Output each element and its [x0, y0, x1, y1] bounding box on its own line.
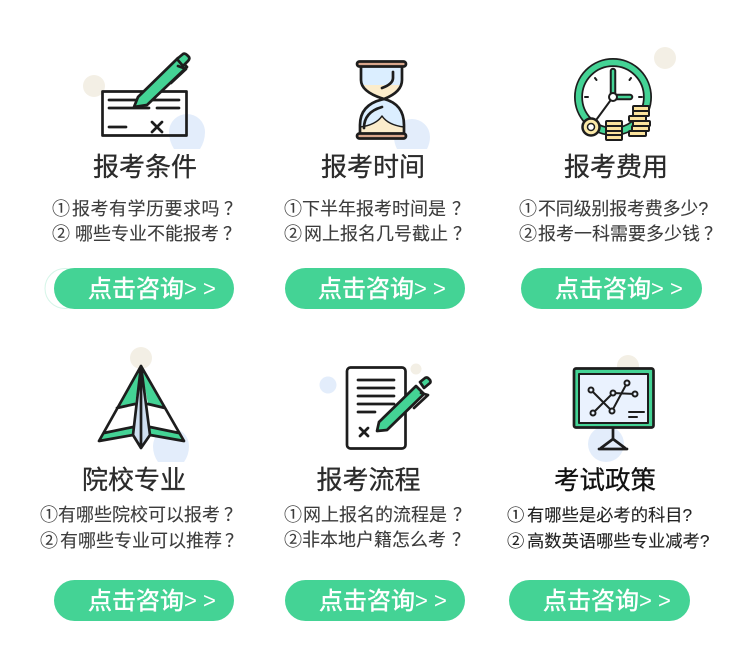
- question 1: 网上报名的流程是: [303, 505, 447, 525]
- button: 点击咨询: [88, 588, 184, 615]
- icon: clock and coins: [578, 47, 676, 140]
- button: > >: [639, 588, 671, 613]
- question 1: ①: [52, 199, 70, 219]
- question 1: ①: [40, 505, 58, 525]
- button: [521, 268, 702, 309]
- question 2: 高数英语哪些专业减考?: [527, 531, 709, 551]
- heading: 考试政策: [554, 467, 656, 495]
- question 2: ②: [40, 531, 58, 551]
- question 2: 有哪些专业可以推荐: [60, 531, 222, 551]
- button: [45, 268, 234, 309]
- button: > >: [651, 276, 683, 301]
- heading: 报考流程: [316, 465, 421, 495]
- question 1: 有哪些院校可以报考: [58, 505, 220, 525]
- button: 点击咨询: [319, 588, 415, 615]
- icon: paper plane: [99, 347, 189, 462]
- button: 点击咨询: [318, 276, 414, 303]
- question 1: ①: [284, 199, 302, 219]
- question 2: ②: [507, 531, 524, 551]
- question 2: ②: [284, 224, 302, 244]
- question 1: ①: [507, 505, 524, 525]
- panel: 考试政策: [507, 355, 709, 621]
- panel: 报考流程: [284, 364, 471, 621]
- panel: 院校专业: [40, 347, 243, 621]
- heading: 报考条件: [93, 152, 197, 182]
- question 2: ②: [284, 530, 302, 550]
- question 1: ？: [224, 505, 242, 525]
- button: [285, 268, 465, 309]
- icon: presentation board: [574, 355, 654, 462]
- question 1: ？: [224, 199, 242, 219]
- button: > >: [184, 276, 216, 301]
- question 2: ？: [223, 224, 241, 244]
- question 2: 网上报名几号截止: [304, 224, 448, 244]
- question 1: ？: [453, 505, 471, 525]
- question 2: ②: [519, 224, 537, 244]
- question 2: ？: [225, 531, 243, 551]
- question 2: ②: [52, 224, 70, 244]
- question 2: ？: [452, 530, 470, 550]
- icon: hourglass: [357, 62, 430, 149]
- question 2: 非本地户籍怎么考: [302, 530, 446, 550]
- question 2: 报考一科需要多少钱: [538, 224, 700, 244]
- panel: 报考时间: [284, 62, 471, 309]
- icon: document and pen: [320, 364, 430, 448]
- question 2: 哪些专业不能报考: [75, 224, 219, 244]
- heading: 报考费用: [564, 152, 668, 182]
- panel: 报考费用: [519, 47, 722, 309]
- question 1: 有哪些是必考的科目?: [527, 505, 692, 525]
- button: 点击咨询: [543, 588, 639, 615]
- question 2: ？: [453, 224, 471, 244]
- question 1: 报考有学历要求吗: [72, 199, 220, 219]
- button: 点击咨询: [555, 276, 651, 303]
- button: 点击咨询: [88, 276, 184, 303]
- button: > >: [184, 588, 216, 613]
- button: > >: [415, 588, 447, 613]
- button: [509, 580, 690, 621]
- question 1: ①: [284, 505, 302, 525]
- button: > >: [414, 276, 446, 301]
- button: [54, 580, 234, 621]
- question 1: 下半年报考时间是: [302, 199, 446, 219]
- question 1: 不同级别报考费多少?: [538, 199, 708, 219]
- icon: cheque and pen: [83, 54, 205, 149]
- question 1: ①: [519, 199, 537, 219]
- question 1: ？: [452, 199, 470, 219]
- panel: 报考条件: [45, 54, 242, 309]
- heading: 院校专业: [82, 465, 186, 495]
- heading: 报考时间: [321, 152, 425, 182]
- button: [285, 580, 465, 621]
- question 2: ？: [704, 224, 722, 244]
